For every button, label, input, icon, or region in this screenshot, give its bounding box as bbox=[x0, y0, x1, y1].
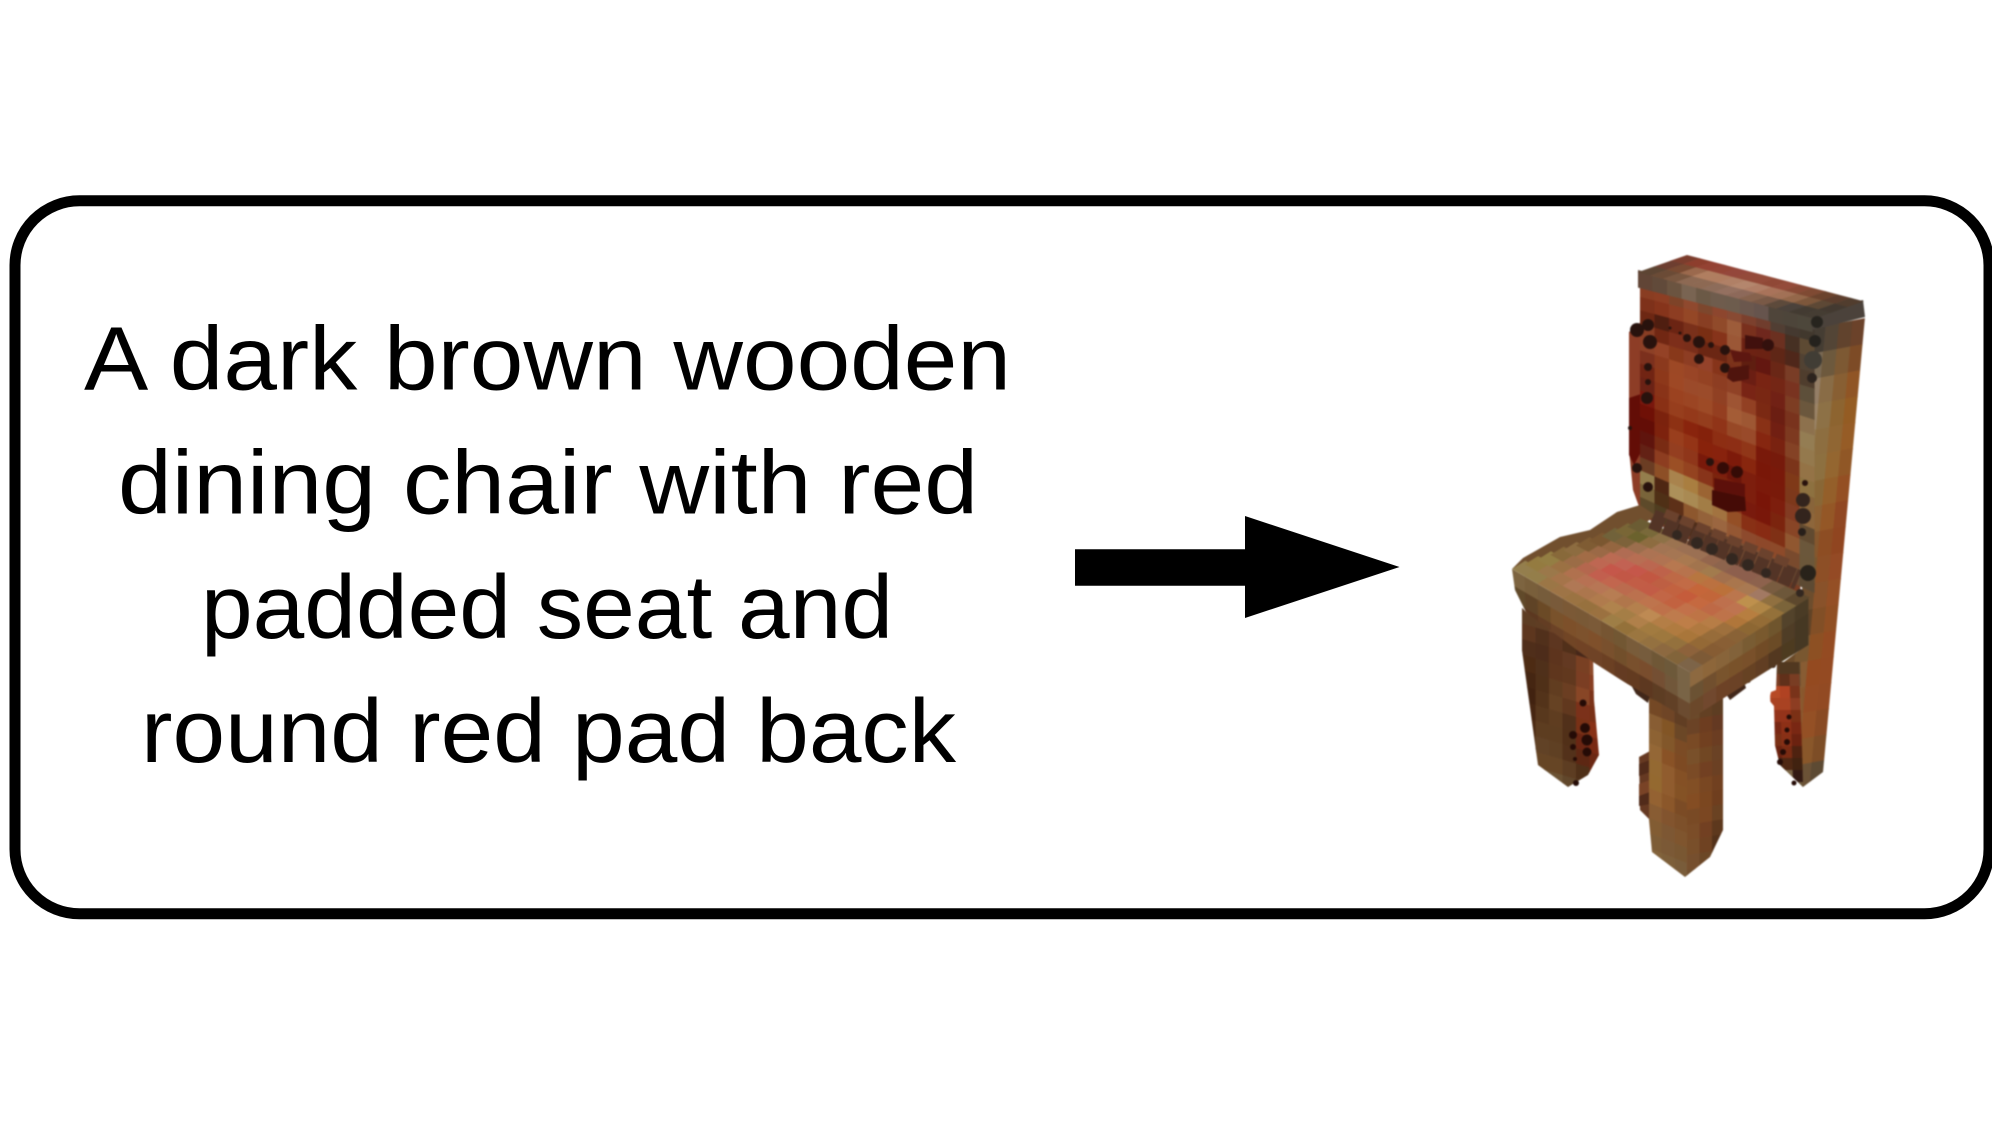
chair back top rim bbox=[1638, 270, 1865, 332]
center leg side protrusion bbox=[1639, 751, 1650, 820]
chair back top face bbox=[1637, 255, 1864, 319]
dark voxels on left leg bbox=[1569, 700, 1592, 786]
back right leg inner face bbox=[1769, 661, 1804, 786]
text block: chair description prompt: padded seat and bbox=[201, 558, 893, 658]
text block: chair description prompt bbox=[84, 310, 1011, 782]
chair back post side bbox=[1769, 318, 1867, 797]
icon: voxel chair bbox=[1512, 255, 1867, 901]
seat front apron bbox=[1512, 569, 1691, 721]
seat far-left edge lumps bbox=[1512, 505, 1655, 569]
dark voxel blobs on chair back bbox=[1628, 316, 1823, 536]
seat right side apron bbox=[1690, 598, 1808, 719]
text block: chair description prompt: dining chair with red bbox=[118, 434, 978, 534]
chair back under-fill bbox=[1640, 272, 1812, 596]
chair back front face bbox=[1640, 284, 1815, 593]
arrow: text to 3D result bbox=[1075, 516, 1400, 618]
text block: chair description prompt: A dark brown wooden bbox=[84, 310, 1011, 410]
seat back-edge cushion blocks bbox=[1652, 513, 1816, 597]
chair back left edge bbox=[1629, 322, 1641, 512]
dark voxels on back right leg bbox=[1777, 714, 1796, 786]
front left leg bbox=[1521, 607, 1600, 788]
seat top face bbox=[1512, 518, 1810, 672]
small dark lumps under seat apron bbox=[1630, 662, 1776, 703]
text block: chair description prompt: round red pad back bbox=[141, 682, 957, 782]
front center leg bbox=[1648, 696, 1724, 878]
panel: rounded frame bbox=[15, 201, 1989, 914]
